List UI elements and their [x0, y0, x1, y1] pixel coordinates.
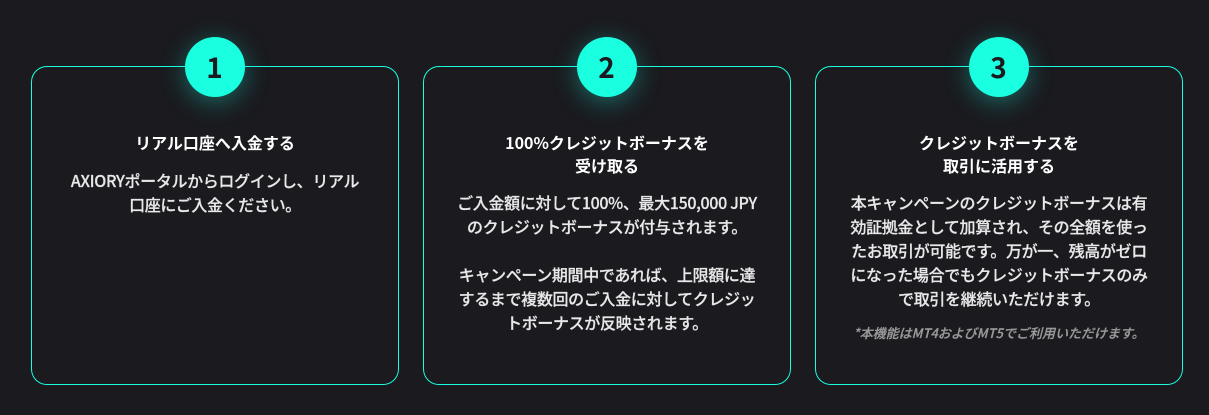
text: step 3 description: になった場合でもクレジットボーナスのみ [850, 262, 1148, 286]
text: step 1 description: AXIORYポータルからログインし、リアル [71, 168, 359, 192]
heading: step 1: リアル口座へ入金する [135, 130, 295, 154]
text: step 3 description: で取引を継続いただけます。 [898, 286, 1100, 310]
text: step 2 description: ご入金額に対して100%、最大150,000 JPY [457, 190, 757, 214]
icon: number 2 badge: 2 [598, 47, 615, 87]
icon: number 1 badge [185, 37, 245, 97]
heading: step 3: 取引に活用する [943, 153, 1055, 177]
icon: number 3 badge [969, 37, 1029, 97]
text: step 3 description: 本キャンペーンのクレジットボーナスは有 [851, 190, 1147, 214]
panel: step 2 [423, 66, 791, 385]
text: step 3 description: たお取引が可能です。万が一、残高がゼロ [851, 238, 1147, 262]
icon: number 2 badge [577, 37, 637, 97]
heading: step 2 [505, 130, 709, 177]
text: step 3 description: 効証拠金として加算され、その全額を使っ [850, 214, 1148, 238]
heading: step 2: 100%クレジットボーナスを [505, 130, 709, 154]
text: step 1 description: 口座にご入金ください。 [129, 192, 301, 216]
text: step 1 description [70, 168, 359, 216]
text: step 2 description [457, 190, 758, 334]
heading: step 3 [919, 130, 1079, 177]
panel: step 1 [31, 66, 399, 385]
panel: step 3 [815, 66, 1183, 385]
icon: number 3 badge: 3 [990, 47, 1007, 87]
heading: step 3: クレジットボーナスを [919, 130, 1079, 154]
text: step 2 description: キャンペーン期間中であれば、上限額に達 [459, 262, 755, 286]
text: step 3 description [850, 190, 1148, 310]
text: step 2 description: トボーナスが反映されます。 [506, 310, 708, 334]
text: step 2 description: のクレジットボーナスが付与されます。 [467, 214, 747, 238]
heading: step 2: 受け取る [575, 153, 639, 177]
text: step 3 note: *本機能はMT4およびMT5でご利用いただけます。 [853, 323, 1145, 342]
icon: number 1 badge: 1 [206, 47, 223, 87]
text: step 2 description: するまで複数回のご入金に対してクレジッ [459, 286, 755, 310]
